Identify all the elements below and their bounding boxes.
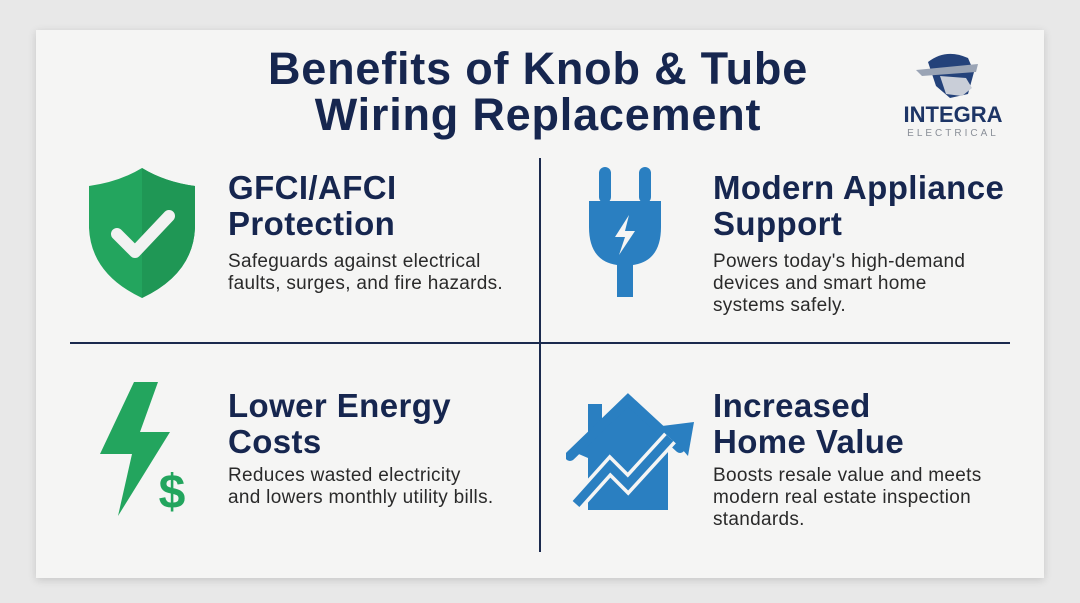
heading: appliance: Support: [713, 205, 842, 242]
heading: energy: Costs: [228, 423, 322, 460]
text: home value: modern real estate inspection: [713, 487, 971, 508]
heading: energy: [228, 387, 451, 460]
logo: INTEGRA: [904, 102, 1003, 127]
heading: home value: Home Value: [713, 423, 904, 460]
text: GFCI: faults, surges, and fire hazards.: [228, 273, 503, 294]
dividers: [539, 158, 541, 552]
icon: house: [566, 393, 694, 510]
text: energy: Reduces wasted electricity: [228, 465, 461, 486]
heading: appliance: [713, 169, 1004, 242]
logo: [904, 54, 1003, 139]
text: home value: [713, 465, 982, 530]
text: appliance: Powers today's high-demand: [713, 251, 965, 272]
logo: ELECTRICAL: [907, 128, 999, 139]
heading: energy: Lower Energy: [228, 387, 451, 424]
icon: plug: [589, 167, 661, 297]
title: Benefits of Knob & Tube: [268, 43, 808, 94]
heading: GFCI: Protection: [228, 205, 395, 242]
text: GFCI: Safeguards against electrical: [228, 251, 481, 272]
text: home value: Boosts resale value and meets: [713, 465, 982, 486]
heading: home value: Increased: [713, 387, 871, 424]
icon: shield: [89, 168, 195, 298]
icon: bolt dollar: [100, 382, 186, 518]
text: energy: [228, 465, 493, 508]
heading: GFCI: GFCI/AFCI: [228, 169, 397, 206]
icon: bolt dollar: $: [159, 466, 186, 518]
heading: GFCI: [228, 169, 397, 242]
text: appliance: systems safely.: [713, 295, 846, 316]
text: appliance: [713, 251, 965, 316]
text: GFCI: [228, 251, 503, 294]
text: appliance: devices and smart home: [713, 273, 927, 294]
text: home value: standards.: [713, 509, 805, 530]
title: Wiring Replacement: [315, 89, 761, 140]
text: energy: and lowers monthly utility bills.: [228, 487, 493, 508]
title: [268, 43, 808, 140]
heading: appliance: Modern Appliance: [713, 169, 1004, 206]
heading: home value: [713, 387, 904, 460]
